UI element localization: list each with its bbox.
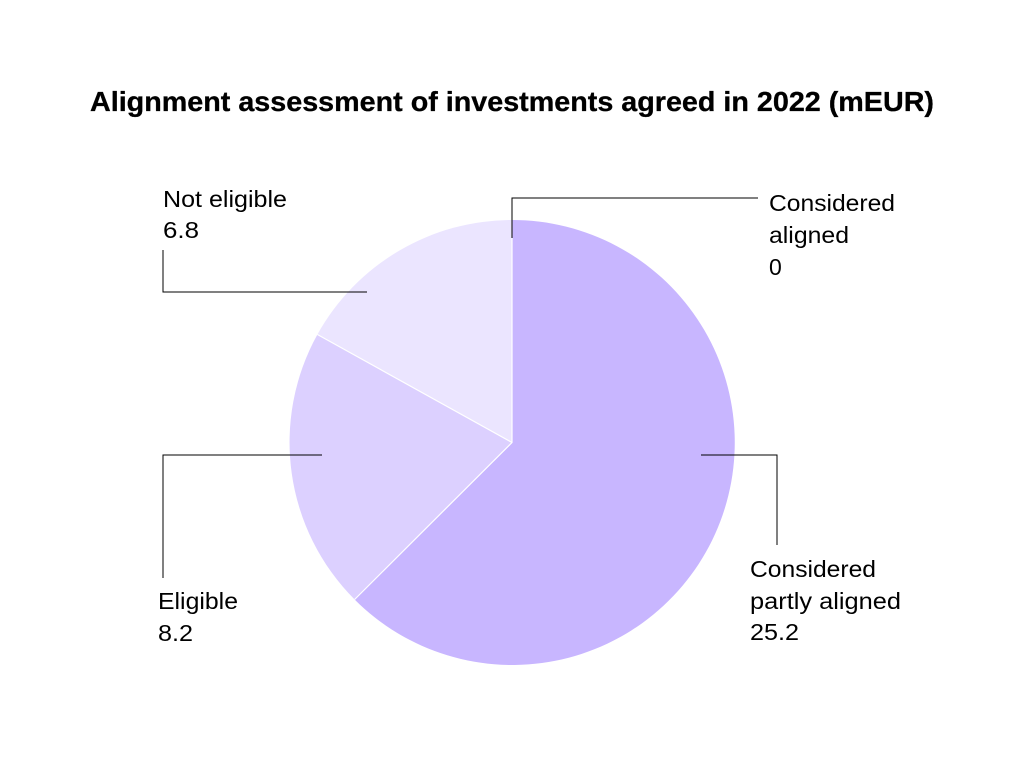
leader line: considered aligned	[512, 198, 758, 238]
leader line: eligible	[163, 455, 322, 578]
pie chart	[290, 220, 735, 665]
label: considered aligned: aligned	[769, 222, 849, 248]
slice separators	[317, 220, 512, 600]
label: eligible: Eligible	[158, 588, 238, 614]
label: eligible: 8.2	[158, 620, 193, 646]
label: considered aligned: 0	[769, 254, 782, 280]
label: considered partly aligned: Considered	[750, 556, 876, 582]
slice: not eligible	[317, 220, 512, 442]
label: not eligible: 6.8	[163, 217, 199, 243]
label: considered partly aligned	[750, 556, 901, 645]
slice: eligible	[290, 334, 512, 600]
leader line: considered partly aligned	[701, 455, 777, 545]
slice: considered partly aligned	[355, 220, 735, 665]
label: eligible	[158, 588, 238, 646]
label: considered aligned: Considered	[769, 190, 895, 216]
label: considered partly aligned: partly aligned	[750, 588, 901, 614]
label: not eligible	[163, 186, 287, 243]
label: considered aligned	[769, 190, 895, 280]
label: considered partly aligned: 25.2	[750, 619, 799, 645]
label: not eligible: Not eligible	[163, 186, 287, 212]
title: Alignment assessment of investments agreed in 2022 (mEUR)	[90, 86, 934, 117]
leader line: not eligible	[163, 250, 367, 292]
